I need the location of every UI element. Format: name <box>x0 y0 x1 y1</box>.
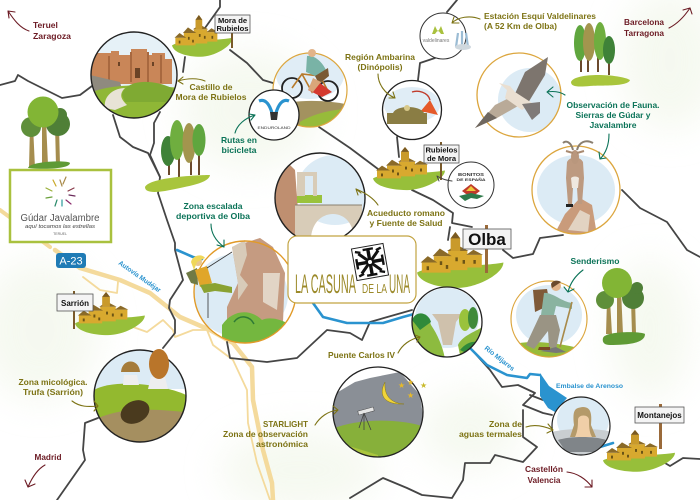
label: Castillo de Mora: Mora de Rubielos <box>176 92 247 102</box>
label: Estacion Esqui <box>484 11 596 31</box>
circle: STARLIGHT astronomy: ★ <box>407 378 414 387</box>
icon: round trees left <box>21 96 70 169</box>
label: STARLIGHT: STARLIGHT <box>263 419 309 429</box>
circle: Bonitos de Espana: BONITOS <box>458 172 484 177</box>
circle: STARLIGHT astronomy <box>330 367 427 460</box>
village: Rubielos de Mora <box>373 142 459 190</box>
panel: Gudar Javalambre logo: TERUEL <box>53 232 67 236</box>
arrow: Rutas <box>235 114 255 133</box>
village: Mora de Rubelos: Rubielos <box>216 24 249 33</box>
arrow: escalada <box>211 224 224 247</box>
circle: Region Ambarina <box>382 80 442 140</box>
label: Teruel Zaragoza: Zaragoza <box>33 31 71 41</box>
label: Madrid: Madrid <box>34 452 62 462</box>
arrow: Ambarina <box>378 74 395 98</box>
text: UNA <box>389 269 410 299</box>
circle: Bonitos de Espana: DE ESPAÑA <box>456 177 486 182</box>
circle: STARLIGHT astronomy: ★ <box>407 391 414 400</box>
panel: La Casuna de la Una title: LA CASUNA <box>295 269 356 299</box>
label: Teruel Zaragoza: Teruel <box>33 20 58 30</box>
circle: Valdelinares ski: valdelinares <box>423 38 450 44</box>
circle: senderismo hiker <box>511 281 590 362</box>
label: STARLIGHT <box>223 419 309 449</box>
arrow: Bonitos <box>437 176 452 181</box>
rivers <box>177 250 613 447</box>
panel: La Casuna de la Una title <box>288 236 416 303</box>
label: Rio Mijares: Río Mijares <box>483 345 516 373</box>
label: Estacion Esqui: (A 52 Km de Olba) <box>484 21 557 31</box>
label: Puente Carlos IV: Puente Carlos IV <box>328 350 395 360</box>
circle: zona micologica <box>94 349 186 450</box>
village: Montanejos <box>603 404 684 472</box>
label: Observacion de Fauna: Javalambre <box>590 120 637 130</box>
arrow: Madrid <box>25 465 45 487</box>
A-23 road badge <box>56 253 86 268</box>
label: Zona de aguas termales: aguas termales <box>459 429 522 439</box>
label: Zona escalada <box>176 201 250 221</box>
arrow: Starlight <box>315 406 338 425</box>
label: Barcelona Tarragona <box>624 17 664 38</box>
label: Zona escalada: deportiva de Olba <box>176 211 250 221</box>
arrow: termales <box>526 424 553 433</box>
village: Olba <box>417 225 511 288</box>
arrow: micologica <box>72 401 98 411</box>
label: Zona micologica: Trufa (Sarrión) <box>23 387 83 397</box>
label: Castillo de Mora: Castillo de <box>190 82 233 92</box>
label: Estacion Esqui: Estación Esquí Valdelinares <box>484 11 596 21</box>
arrow: Senderismo <box>564 270 583 292</box>
arrow: ibex <box>599 134 609 159</box>
icon: tall trees centre <box>145 120 210 192</box>
icon: black and white emblem <box>351 243 389 281</box>
label: Rutas en bicicleta: Rutas en <box>221 135 257 145</box>
label: STARLIGHT: astronómica <box>256 439 308 449</box>
arrow: Castillo <box>178 77 205 84</box>
panel: Gudar Javalambre logo <box>10 170 111 242</box>
label: STARLIGHT: Zona de observación <box>223 429 308 439</box>
label: Castellon Valencia <box>525 464 563 485</box>
label: Autovia Mudejar: Autovía Mudéjar <box>117 260 162 295</box>
circle: Enduroland logo <box>249 90 299 140</box>
panel: La Casuna de la Una title: DE LA <box>362 281 387 296</box>
label: Castillo de Mora <box>176 82 247 102</box>
village: Sarrion: Sarrión <box>61 299 89 308</box>
label: Zona de aguas termales <box>459 419 522 439</box>
circle: Castillo de Mora de Rubielos <box>90 31 178 119</box>
village: Sarrion <box>57 291 145 335</box>
circle: fauna ibex <box>532 141 620 235</box>
icon: tall trees top right <box>571 22 630 87</box>
label: Region Ambarina <box>345 52 415 72</box>
circle: STARLIGHT astronomy: ★ <box>398 381 405 390</box>
arrow: Castellon <box>567 472 592 487</box>
label: Rutas en bicicleta: bicicleta <box>222 145 257 155</box>
circle: Valdelinares ski <box>420 13 471 59</box>
label: Embalse de Arenoso: Embalse de Arenoso <box>556 383 623 390</box>
arrow: Valdelinares <box>452 17 480 23</box>
panel: Gudar Javalambre logo: aquí tocamos las estrellas <box>25 224 95 230</box>
label: Observacion de Fauna <box>566 100 660 130</box>
label: Acueducto romano: Acueducto romano <box>367 208 445 218</box>
arrow: Teruel <box>8 11 29 31</box>
circle: bicycle routes <box>270 49 350 130</box>
label: Teruel Zaragoza <box>33 20 71 41</box>
label: Castellon Valencia: Valencia <box>528 475 561 485</box>
label: Zona de aguas termales: Zona de <box>489 419 522 429</box>
label: Barcelona Tarragona: Tarragona <box>624 28 664 38</box>
village: Rubielos de Mora: Rubielos <box>425 146 458 154</box>
label: Region Ambarina: (Dinópolis) <box>358 62 403 72</box>
arrow: Puente <box>398 335 420 353</box>
label: Acueducto romano <box>367 208 445 228</box>
label: Rutas en bicicleta <box>221 135 257 155</box>
A-23 road badge: A-23 <box>59 256 83 268</box>
circle: zona escalada climber <box>186 238 296 345</box>
arrow: Acueducto <box>356 189 378 205</box>
label: Observacion de Fauna: Sierras de Gúdar y <box>576 110 651 120</box>
circle: Bonitos de Espana <box>448 162 494 208</box>
label: Zona micologica: Zona micológica. <box>18 377 88 387</box>
village: Mora de Rubelos <box>172 15 250 57</box>
village: Mora de Rubelos: Mora de <box>218 16 247 25</box>
label: Acueducto romano: y Fuente de Salud <box>370 218 442 228</box>
label: Zona escalada: Zona escalada <box>184 201 243 211</box>
arrow: vulture <box>547 87 565 97</box>
circle: acueducto romano <box>274 152 366 236</box>
label: Senderismo: Senderismo <box>570 256 620 266</box>
label: Region Ambarina: Región Ambarina <box>345 52 415 62</box>
circle: Puente Carlos IV <box>410 287 485 360</box>
icon: round trees right <box>596 268 645 345</box>
label: Zona micologica <box>18 377 88 397</box>
village: Montanejos: Montanejos <box>637 411 682 420</box>
yellow roads <box>0 210 273 500</box>
arrow: Barcelona <box>669 8 692 28</box>
village: Olba: Olba <box>468 230 506 249</box>
label: Castellon Valencia: Castellón <box>525 464 563 474</box>
circle: STARLIGHT astronomy: ★ <box>420 381 427 390</box>
panel: Gudar Javalambre logo: Gúdar Javalambre <box>20 213 100 224</box>
label: Observacion de Fauna: Observación de Fauna. <box>566 100 660 110</box>
circle: aguas termales <box>552 396 612 455</box>
label: Barcelona Tarragona: Barcelona <box>624 17 664 27</box>
circle: fauna vulture <box>475 53 562 137</box>
village: Rubielos de Mora: de Mora <box>427 154 457 163</box>
circle: Enduroland logo: ENDUROLAND <box>258 125 291 130</box>
